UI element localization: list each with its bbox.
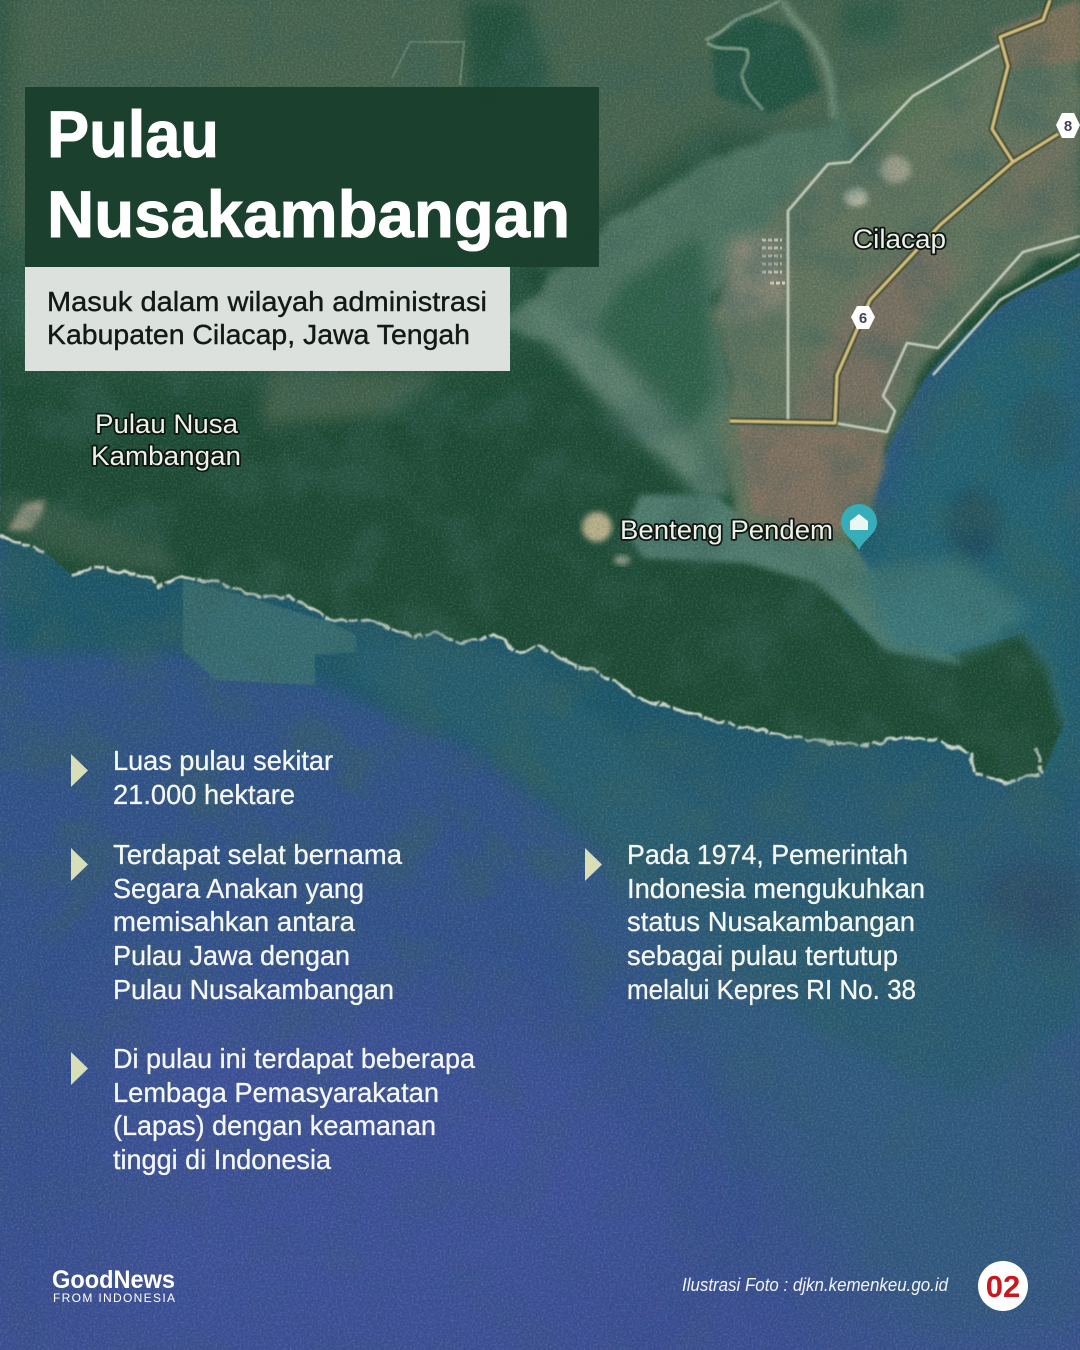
town land	[712, 0, 1080, 545]
soft east edge of island	[1000, 630, 1064, 723]
strait south of estuary	[625, 495, 965, 665]
bullet: lapas	[71, 1043, 475, 1175]
title: Pulau	[47, 97, 219, 171]
icon: arrow	[585, 848, 602, 881]
text: lapas: (Lapas) dengan keamanan	[113, 1110, 436, 1141]
text: keppres: status Nusakambangan	[627, 906, 915, 937]
logo: GoodNews from Indonesia	[52, 1266, 175, 1305]
text: luas pulau: 21.000 hektare	[113, 779, 295, 810]
mangrove wedge	[595, 235, 715, 430]
lower channel highlight	[520, 300, 725, 495]
text: selat: Terdapat selat bernama	[113, 839, 402, 870]
subtitle panel: Kabupaten Cilacap, Jawa Tengah	[47, 319, 470, 350]
text: keppres: Pada 1974, Pemerintah	[627, 839, 908, 870]
text: keppres	[627, 839, 925, 1005]
map label: Cilacap: Cilacap	[853, 224, 946, 254]
text: luas pulau: Luas pulau sekitar	[113, 745, 333, 776]
land mass	[0, 0, 1080, 782]
title: Nusakambangan	[47, 177, 570, 251]
text: lapas: Lembaga Pemasyarakatan	[113, 1077, 439, 1108]
logo: GoodNews from Indonesia: GoodNews	[52, 1266, 175, 1294]
text: selat: Pulau Jawa dengan	[113, 940, 350, 971]
bullet: luas pulau	[71, 745, 333, 810]
bullet: keppres	[585, 839, 925, 1005]
icon: map pin	[841, 504, 877, 550]
icon: arrow	[71, 848, 88, 881]
text: keppres: sebagai pulau tertutup	[627, 940, 898, 971]
map roads	[730, 0, 1080, 432]
text: lapas: tinggi di Indonesia	[113, 1144, 331, 1175]
map label: Benteng Pendem: Benteng Pendem	[620, 515, 833, 545]
bullet: selat	[71, 839, 402, 1005]
logo: GoodNews from Indonesia: FROM INDONESIA	[53, 1291, 175, 1305]
text: selat: Segara Anakan yang	[113, 873, 364, 904]
subtitle panel: Masuk dalam wilayah administrasi	[47, 286, 487, 317]
icon: arrow	[71, 1052, 88, 1085]
text: keppres: melalui Kepres RI No. 38	[627, 974, 916, 1005]
title	[47, 97, 570, 251]
icon: road shield 8: 8	[1064, 118, 1072, 135]
icon: arrow	[71, 754, 88, 787]
text: lapas: Di pulau ini terdapat beberapa	[113, 1043, 475, 1074]
text: selat: memisahkan antara	[113, 906, 355, 937]
text: keppres: Indonesia mengukuhkan	[627, 873, 925, 904]
icon: road shield 6: 6	[859, 310, 867, 327]
map label: Pulau Nusa Kambangan: Pulau Nusa	[95, 409, 239, 439]
photo credit: Ilustrasi Foto : djkn.kemenkeu.go.id	[682, 1275, 949, 1295]
text: selat: Pulau Nusakambangan	[113, 974, 394, 1005]
map label: Pulau Nusa Kambangan: Kambangan	[91, 441, 241, 471]
subtitle panel	[25, 267, 510, 371]
page number	[978, 1261, 1028, 1311]
map label: Pulau Nusa Kambangan	[91, 409, 241, 471]
text: selat	[113, 839, 402, 1005]
estuary	[500, 100, 860, 500]
icon: road shield 6	[851, 306, 875, 329]
settlement dots	[762, 240, 785, 283]
icon: road shield 8	[1056, 113, 1080, 138]
title panel	[25, 87, 599, 267]
shallow water east	[860, 560, 1030, 658]
upper olive land	[0, 0, 1080, 260]
surf line	[0, 535, 1043, 782]
page number: 02	[986, 1269, 1020, 1304]
text: luas pulau	[113, 745, 333, 810]
text: lapas	[113, 1043, 475, 1175]
